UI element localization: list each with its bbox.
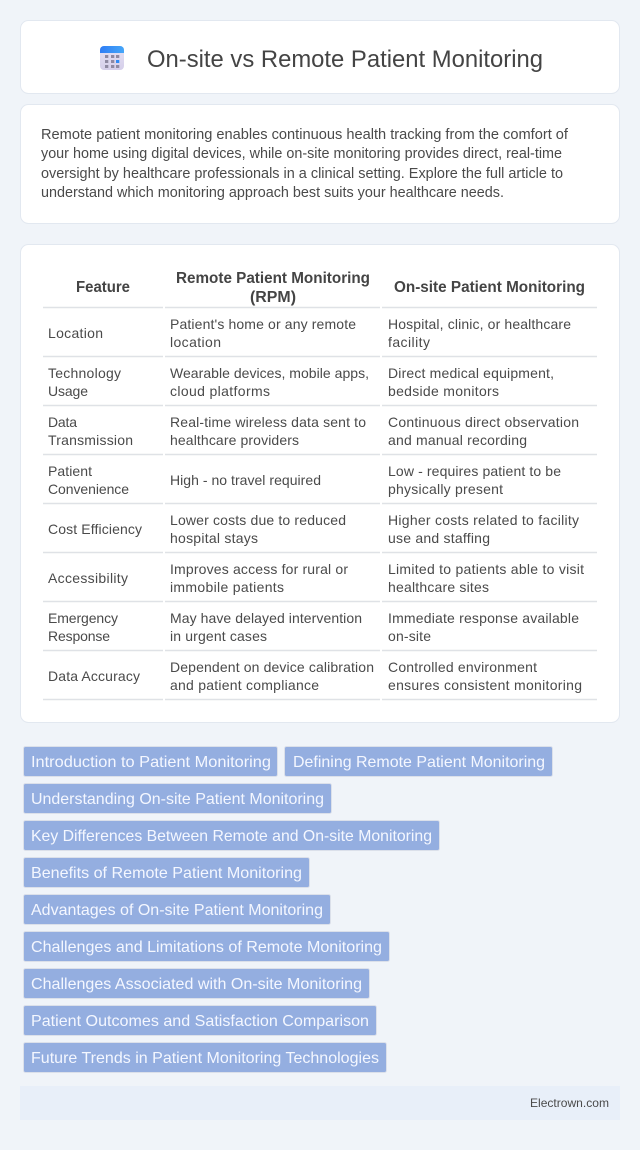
row: data transmission: Real-time wireless data sent to — [170, 414, 366, 430]
tag — [24, 784, 332, 814]
text block: introduction — [41, 127, 569, 201]
tag: Challenges Associated with On-site Monitoring — [31, 976, 362, 993]
row: data transmission — [48, 414, 579, 448]
tag: Introduction to Patient Monitoring — [31, 754, 271, 771]
row: emergency response — [48, 610, 579, 644]
text block: introduction: your home using digital devices, while on-site monitoring provides direct, real-time — [41, 146, 562, 162]
row: technology usage: Wearable devices, mobile apps, — [170, 365, 369, 381]
panel: comparison table — [20, 244, 620, 722]
row: technology usage: cloud platforms — [170, 383, 270, 399]
row: emergency response: May have delayed intervention — [170, 610, 362, 626]
row: data accuracy: Data Accuracy — [48, 668, 140, 684]
text block: introduction: Remote patient monitoring enables continuous health tracking from the comfort of — [41, 127, 569, 143]
row: patient convenience: physically present — [388, 481, 503, 497]
text block: introduction: oversight by healthcare professionals in a clinical setting. Explore the full article to — [41, 166, 563, 182]
row: location: location — [170, 334, 221, 350]
tag: Challenges and Limitations of Remote Monitoring — [31, 939, 382, 956]
title: On-site vs Remote Patient Monitoring — [147, 46, 543, 73]
row: data transmission: healthcare providers — [170, 432, 299, 448]
table header: Remote Patient Monitoring — [176, 270, 370, 287]
row: cost efficiency: Cost Efficiency — [48, 521, 142, 537]
tag — [24, 894, 330, 924]
row: technology usage: Technology — [48, 365, 121, 381]
row: patient convenience: Patient — [48, 463, 92, 479]
row: location: Hospital, clinic, or healthcare — [388, 316, 571, 332]
row: cost efficiency: Lower costs due to reduced — [170, 512, 346, 528]
tag: Key Differences Between Remote and On-site Monitoring — [31, 828, 432, 845]
row: patient convenience: High - no travel required — [170, 472, 321, 488]
panel: introduction — [20, 104, 620, 224]
tag — [24, 820, 440, 850]
tag — [24, 932, 390, 962]
row: patient convenience: Convenience — [48, 481, 129, 497]
row: cost efficiency: Higher costs related to facility — [388, 512, 579, 528]
row: technology usage: Usage — [48, 383, 88, 399]
row: technology usage: Direct medical equipment, — [388, 365, 554, 381]
panel: header — [20, 20, 620, 94]
row: emergency response: on-site — [388, 628, 431, 644]
row: emergency response: in urgent cases — [170, 628, 267, 644]
tag: Understanding On-site Patient Monitoring — [31, 791, 324, 808]
footer — [20, 1086, 620, 1120]
row: patient convenience: Low - requires patient to be — [388, 463, 561, 479]
tag: Future Trends in Patient Monitoring Technologies — [31, 1050, 379, 1067]
table header — [76, 270, 585, 306]
tag — [24, 1042, 386, 1072]
row: emergency response: Immediate response available — [388, 610, 579, 626]
row: accessibility: Accessibility — [48, 570, 128, 586]
row: data transmission: Continuous direct observation — [388, 414, 579, 430]
table header: On-site Patient Monitoring — [394, 279, 585, 296]
text block: introduction: understand which monitoring approach best suits your healthcare needs. — [41, 185, 504, 201]
row: cost efficiency: use and staffing — [388, 530, 490, 546]
row: data accuracy — [48, 659, 582, 693]
row: accessibility: immobile patients — [170, 579, 284, 595]
row: data transmission: Transmission — [48, 432, 133, 448]
table header: (RPM) — [250, 289, 296, 306]
row: data accuracy: Controlled environment — [388, 659, 537, 675]
tag — [284, 746, 552, 776]
tag: Defining Remote Patient Monitoring — [293, 754, 545, 771]
row: accessibility: Limited to patients able to visit — [388, 561, 584, 577]
row: technology usage — [48, 365, 554, 399]
tag — [24, 746, 278, 776]
row: emergency response: Emergency — [48, 610, 118, 626]
row: data accuracy: ensures consistent monitoring — [388, 677, 582, 693]
row: location: Patient's home or any remote — [170, 316, 356, 332]
row: technology usage: bedside monitors — [388, 383, 499, 399]
tag — [24, 858, 310, 888]
row: data transmission: and manual recording — [388, 432, 527, 448]
tag — [24, 1006, 376, 1036]
table header: Feature — [76, 279, 130, 296]
tag: Patient Outcomes and Satisfaction Comparison — [31, 1013, 369, 1030]
row: location: facility — [388, 334, 430, 350]
tag — [24, 968, 370, 998]
row: accessibility: Improves access for rural or — [170, 561, 348, 577]
row: location — [48, 316, 571, 350]
footer: Electrown.com — [530, 1096, 609, 1110]
row: accessibility — [48, 561, 584, 595]
row: cost efficiency — [48, 512, 579, 546]
row: data transmission: Data — [48, 414, 77, 430]
row: data accuracy: and patient compliance — [170, 677, 319, 693]
tag: Benefits of Remote Patient Monitoring — [31, 865, 302, 882]
tag: Advantages of On-site Patient Monitoring — [31, 902, 323, 919]
row: location: Location — [48, 325, 103, 341]
icon: calendar — [100, 46, 124, 70]
row: data accuracy: Dependent on device calibration — [170, 659, 374, 675]
row: accessibility: healthcare sites — [388, 579, 489, 595]
row: emergency response: Response — [48, 628, 110, 644]
topic tags — [24, 746, 552, 1072]
row: cost efficiency: hospital stays — [170, 530, 258, 546]
row: patient convenience — [48, 463, 561, 497]
